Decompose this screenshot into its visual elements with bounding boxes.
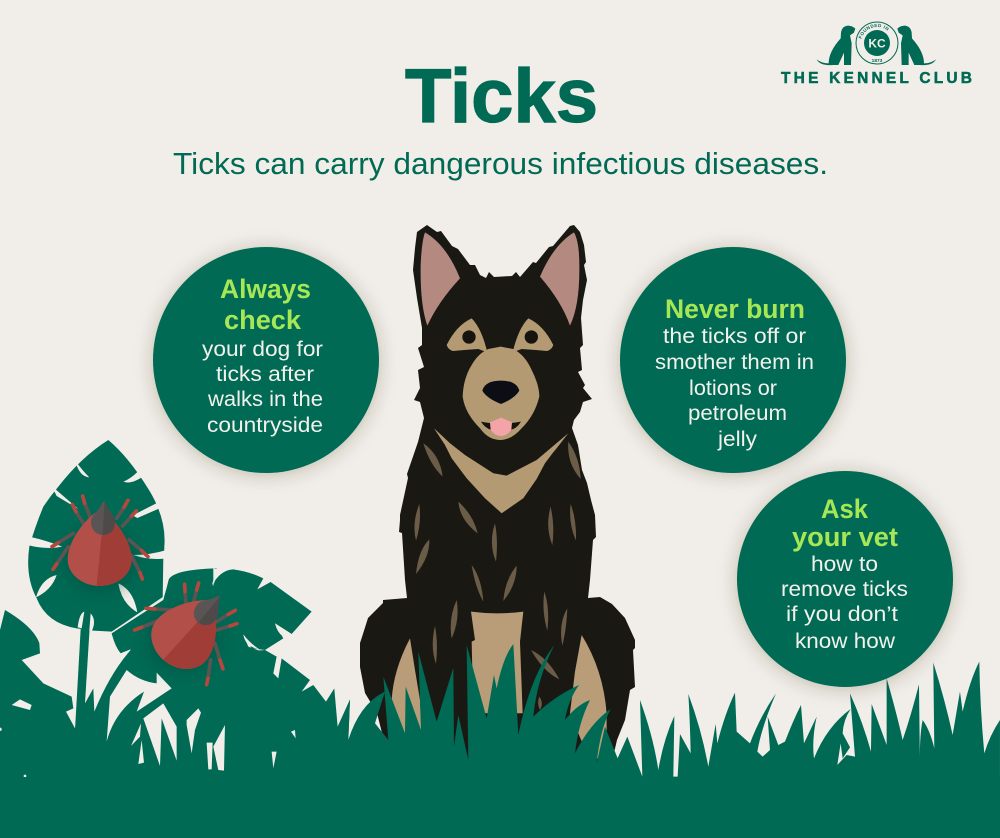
grass sliver — [837, 743, 855, 765]
foliage: monstera leaves and bush — [0, 440, 500, 838]
chest — [434, 428, 568, 513]
leaf 2 — [112, 568, 312, 730]
callout: ask your vet: if you don’t — [786, 603, 898, 626]
tick 1 legs — [52, 496, 148, 579]
title: Ticks — [405, 54, 598, 139]
callout: never burn: smother them in — [655, 351, 814, 374]
callout: never burn: petroleum — [688, 402, 787, 425]
KC roundel: KC — [868, 36, 886, 50]
ears — [421, 232, 579, 326]
dog — [360, 225, 635, 775]
KC roundel: 1873 — [872, 58, 883, 64]
KC roundel — [856, 22, 898, 64]
callout: always check — [153, 247, 379, 473]
callout: never burn — [620, 247, 846, 473]
bush gaps — [0, 670, 296, 777]
callout: always check: ticks after — [216, 363, 314, 386]
mouth — [481, 422, 521, 430]
callout: always check: walks in the — [207, 388, 323, 411]
logo: The Kennel Club — [780, 22, 972, 87]
tick 2 body — [140, 574, 242, 681]
eye patches — [447, 318, 553, 352]
muzzle — [463, 347, 539, 440]
callout: ask your vet: know how — [795, 630, 896, 653]
leaf notches — [27, 462, 292, 649]
tongue — [490, 418, 512, 436]
grass over dog — [340, 644, 673, 838]
callout: never burn: the ticks off or — [663, 325, 806, 348]
subtitle: Ticks can carry dangerous infectious diseases. — [173, 146, 828, 181]
nose — [482, 381, 519, 404]
callout: ask your vet: how to — [811, 553, 878, 576]
tick 1 — [52, 496, 148, 593]
KC roundel: FOUNDED IN — [858, 24, 889, 39]
logo wordmark: THE KENNEL CLUB — [781, 70, 972, 87]
callout: always check: Always — [220, 274, 311, 304]
eyes — [462, 330, 538, 344]
callout: ask your vet: Ask — [821, 494, 869, 524]
callout: always check: check — [224, 305, 302, 335]
foreground grass — [0, 644, 1000, 838]
callout: always check: countryside — [207, 414, 323, 437]
bush silhouette — [0, 610, 500, 838]
tick 2 — [135, 574, 242, 685]
callout: never burn: jelly — [717, 428, 758, 451]
leaf 1 — [28, 440, 165, 730]
logo dogs — [817, 26, 936, 65]
callout: never burn: lotions or — [689, 377, 777, 400]
fur strands upper — [423, 442, 581, 479]
tick 1 body — [68, 501, 132, 586]
callout: never burn: Never burn — [665, 294, 805, 324]
callout: ask your vet: your vet — [792, 522, 898, 552]
callout: ask your vet — [737, 471, 953, 687]
callout: ask your vet: remove ticks — [781, 578, 908, 601]
legs and paws — [390, 612, 607, 763]
ground — [0, 777, 1000, 838]
grass right — [605, 662, 1000, 838]
fur strands — [414, 502, 576, 710]
tick 2 legs — [135, 583, 237, 685]
dog body silhouette — [360, 225, 635, 775]
callout: always check: your dog for — [202, 338, 323, 361]
dog head markings — [421, 232, 581, 513]
